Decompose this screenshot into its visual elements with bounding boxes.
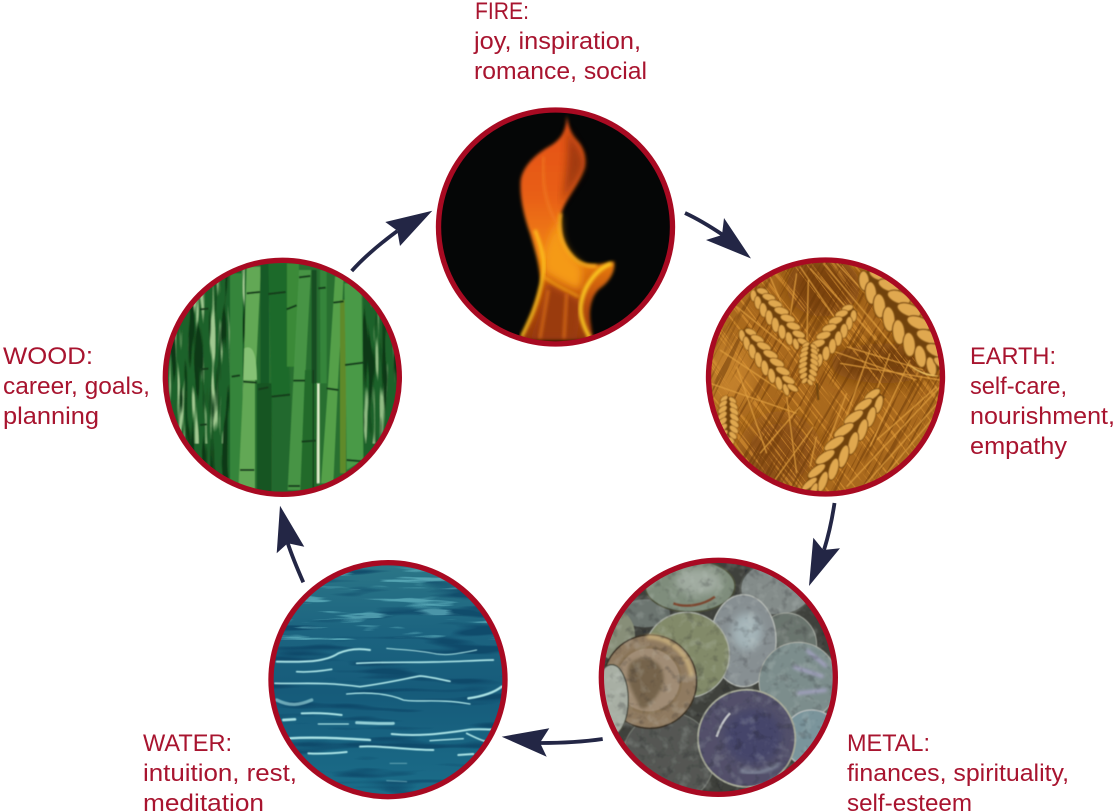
arrow: wood to fire <box>352 211 432 271</box>
label: water <box>143 730 297 812</box>
label: fire: romance, social <box>474 58 647 85</box>
wheat image <box>711 262 940 492</box>
bamboo image <box>165 257 402 500</box>
arrow: earth to metal <box>809 503 840 586</box>
label: water: intuition, rest, <box>143 760 297 787</box>
label: earth: self-care, <box>970 373 1067 400</box>
label: wood: WOOD: <box>3 343 93 370</box>
circle: metal <box>595 557 840 804</box>
fire ring <box>438 110 672 344</box>
circle: fire <box>433 107 677 350</box>
label: fire <box>473 0 647 85</box>
arrow: metal to water <box>502 728 603 757</box>
label: wood: career, goals, <box>3 373 150 400</box>
label: metal <box>847 730 1069 812</box>
arrow: fire to earth <box>685 213 751 258</box>
label: fire: joy, inspiration, <box>473 28 641 55</box>
water ring <box>271 563 505 797</box>
label: wood: planning <box>3 403 99 430</box>
coins image <box>604 563 833 791</box>
label: earth: EARTH: <box>970 343 1056 370</box>
label: earth <box>970 343 1115 460</box>
metal ring <box>601 560 835 794</box>
circle: earth <box>706 257 946 497</box>
label: earth: nourishment, <box>970 403 1115 430</box>
label: earth: empathy <box>970 433 1067 460</box>
circle: wood <box>162 257 405 500</box>
flame image <box>519 115 614 340</box>
earth ring <box>708 260 942 494</box>
label: metal: finances, spirituality, <box>847 760 1069 787</box>
arrow: water to wood <box>277 506 304 582</box>
circle: water <box>267 557 510 803</box>
label: wood <box>3 343 150 430</box>
wood ring <box>165 260 399 494</box>
label: water: WATER: <box>143 730 232 757</box>
water image <box>274 568 502 794</box>
label: metal: METAL: <box>847 730 930 757</box>
